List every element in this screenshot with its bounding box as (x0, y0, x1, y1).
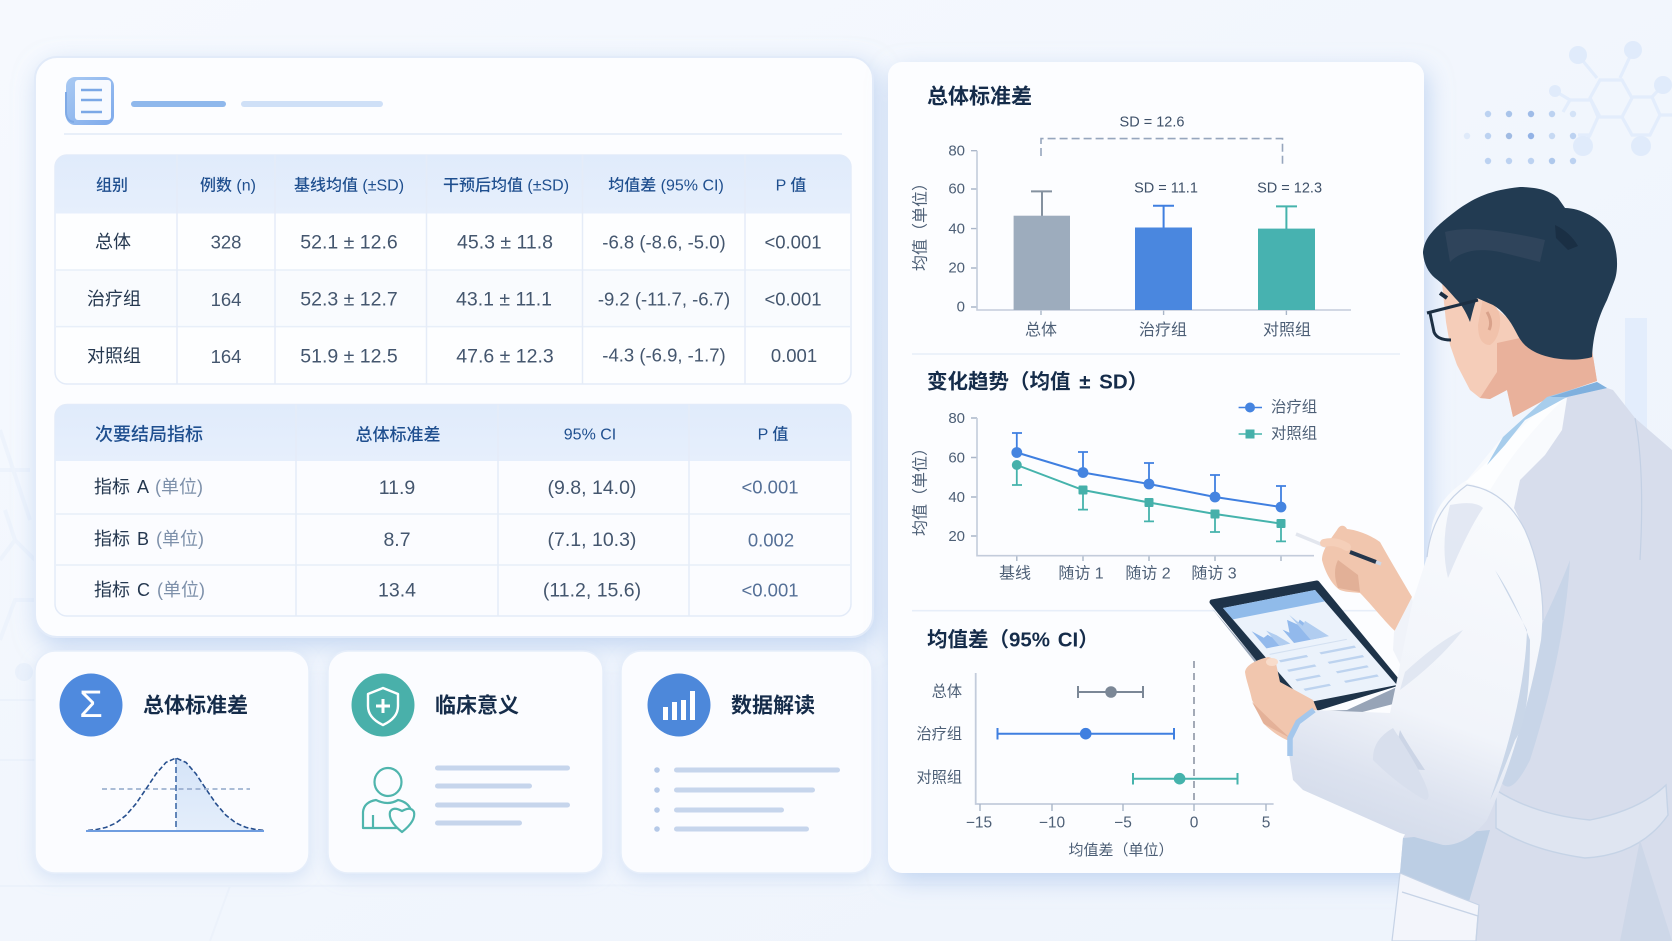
table: secondary outcomes (55, 404, 851, 616)
secondary table header: 总体标准差 (356, 426, 440, 444)
row: 指标 A: <0.001 (741, 476, 799, 498)
decoration: dot grid (1464, 111, 1576, 164)
far hand with stylus (1296, 526, 1420, 668)
bar: 总体: 总体 (1025, 321, 1057, 339)
row: 对照组 (916, 770, 1238, 786)
icon: patient with heart (363, 768, 414, 832)
forest plot: 5 (1262, 814, 1270, 832)
line chart: 随访 3 (1191, 564, 1237, 582)
bar: 对照组: SD = 12.3 (1257, 180, 1322, 196)
card title: 总体标准差 (143, 694, 248, 718)
row: 对照组: 对照组 (87, 346, 141, 366)
row: 总体: 52.1 ± 12.6 (300, 232, 398, 254)
row: 治疗组: -9.2 (-11.7, -6.7) (598, 288, 730, 310)
forest plot: −5 (1114, 814, 1132, 832)
row: 治疗组: 治疗组 (87, 289, 141, 309)
tablet (1210, 583, 1399, 717)
line chart: 基线 (999, 564, 1031, 582)
cuff (1290, 710, 1314, 756)
forest plot: −15 (966, 814, 992, 832)
bar chart: 0 (957, 298, 965, 316)
glasses (1427, 293, 1478, 340)
bar: 对照组 (1257, 180, 1322, 339)
bullet list placeholders (654, 767, 840, 832)
forest plot: 均值差（单位） (1068, 842, 1174, 859)
legend (1239, 398, 1317, 442)
row: 指标 C: 指标 C (单位) (94, 580, 205, 600)
line chart: 20 (948, 528, 965, 545)
bar chart: 80 (948, 142, 965, 160)
bar: 治疗组: SD = 11.1 (1134, 180, 1198, 196)
row: 治疗组: 治疗组 (916, 726, 962, 743)
row: 治疗组: <0.001 (764, 288, 822, 310)
bar: 总体 (1014, 191, 1070, 339)
row: 指标 A (94, 476, 799, 499)
head and neck (1442, 283, 1597, 417)
row: 指标 B: 指标 B (单位) (94, 529, 204, 549)
table header row: 组别 (96, 176, 128, 194)
forest plot: −10 (1039, 814, 1066, 832)
table header row (96, 176, 806, 194)
row: 总体: 45.3 ± 11.8 (457, 232, 553, 254)
row: 总体 (932, 684, 1143, 700)
row: 指标 C (94, 580, 799, 602)
table header row: P 值 (776, 176, 806, 194)
hair (1423, 187, 1617, 360)
card title: 临床意义 (435, 694, 519, 718)
row: 对照组: 0.001 (771, 345, 817, 366)
series: 对照组 (1012, 460, 1286, 541)
near hand (1245, 657, 1318, 742)
row: 总体: 总体 (932, 684, 962, 700)
coat: body (1392, 388, 1672, 941)
icon: document (66, 77, 114, 125)
row: 指标 A: 11.9 (379, 477, 415, 499)
row: 指标 C: <0.001 (741, 580, 799, 600)
row: 对照组: 51.9 ± 12.5 (300, 346, 398, 368)
table header row: 干预后均值 (±SD) (443, 176, 569, 194)
bracket: overall SD (1041, 114, 1282, 166)
table header row: 均值差 (95% CI) (608, 176, 724, 194)
secondary table header: 95% CI (564, 426, 616, 444)
row: 对照组 (87, 344, 817, 368)
line chart: 均值（单位） (912, 440, 930, 536)
secondary table header: 次要结局指标 (95, 424, 203, 444)
row: 总体: 328 (211, 232, 241, 252)
doctor illustration (1210, 187, 1672, 941)
icon: shield (352, 674, 414, 736)
heading: 均值差: 均值差（95% CI） (927, 628, 1099, 652)
row: 指标 B: 8.7 (383, 529, 411, 551)
table header row: 基线均值 (±SD) (294, 176, 404, 194)
card: 数据解读 (621, 651, 872, 873)
card: 临床意义 (328, 651, 603, 873)
normal distribution curve (86, 758, 264, 831)
table: primary outcomes (55, 155, 851, 384)
icon: bar chart (648, 674, 710, 736)
row: 对照组: -4.3 (-6.9, -1.7) (602, 344, 726, 366)
line chart: 随访 2 (1125, 564, 1171, 582)
text placeholder lines (435, 766, 570, 826)
row: 总体: -6.8 (-8.6, -5.0) (602, 232, 726, 252)
bracket: overall SD: SD = 12.6 (1120, 114, 1184, 130)
row: 总体: 总体 (95, 232, 131, 252)
row: 指标 C: 13.4 (378, 580, 416, 602)
row: 指标 A: (9.8, 14.0) (548, 477, 636, 499)
panel: tables (35, 57, 873, 637)
bar: 治疗组 (1134, 180, 1198, 339)
legend: 对照组 (1271, 424, 1317, 442)
bar chart: 均值（单位） (912, 175, 930, 271)
row: 指标 B: 0.002 (748, 530, 794, 550)
heading: 总体标准差: 总体标准差 (927, 86, 1032, 108)
bar: 对照组: 对照组 (1263, 321, 1311, 339)
bar chart: 20 (948, 260, 965, 276)
line chart (912, 398, 1317, 582)
secondary table header (95, 424, 788, 444)
line chart: 随访 1 (1058, 564, 1104, 582)
collar (1487, 382, 1607, 465)
decoration: molecule hexagons (1549, 41, 1672, 156)
row: 治疗组: 164 (211, 289, 241, 310)
row: 指标 B: (7.1, 10.3) (548, 529, 636, 551)
header placeholder bars (131, 101, 383, 107)
bar chart: 40 (948, 220, 965, 238)
row: 指标 A: 指标 A (单位) (94, 477, 203, 497)
card: 总体标准差 (35, 651, 309, 873)
line chart: 40 (948, 489, 965, 506)
icon: sigma (60, 674, 122, 736)
line chart: 60 (948, 450, 965, 466)
row: 指标 B (94, 529, 794, 551)
line chart: 80 (948, 410, 965, 427)
row: 总体: <0.001 (764, 232, 822, 252)
icon: sigma: Σ (79, 684, 103, 726)
row: 对照组: 164 (211, 346, 241, 367)
heading: 变化趋势: 变化趋势（均值 ± SD） (927, 370, 1148, 394)
row: 治疗组: 52.3 ± 12.7 (300, 288, 398, 310)
bar chart (912, 114, 1351, 339)
row: 治疗组 (87, 288, 822, 310)
card title: 数据解读 (731, 694, 815, 718)
row: 总体 (95, 232, 822, 254)
sleeve (1288, 398, 1567, 845)
secondary table header: P 值 (758, 426, 788, 444)
row: 指标 C: (11.2, 15.6) (543, 580, 641, 602)
forest plot: 0 (1190, 814, 1199, 832)
forest plot (916, 661, 1274, 859)
row: 治疗组: 43.1 ± 11.1 (456, 288, 552, 310)
row: 治疗组 (916, 726, 1174, 743)
panel: charts (888, 62, 1424, 873)
series: 治疗组 (1011, 433, 1286, 512)
row: 对照组: 对照组 (916, 770, 962, 786)
row: 对照组: 47.6 ± 12.3 (456, 346, 554, 368)
bar chart: 60 (948, 180, 965, 198)
legend: 治疗组 (1271, 398, 1317, 416)
bar: 治疗组: 治疗组 (1139, 321, 1187, 339)
table header row: 例数 (n) (200, 176, 256, 194)
